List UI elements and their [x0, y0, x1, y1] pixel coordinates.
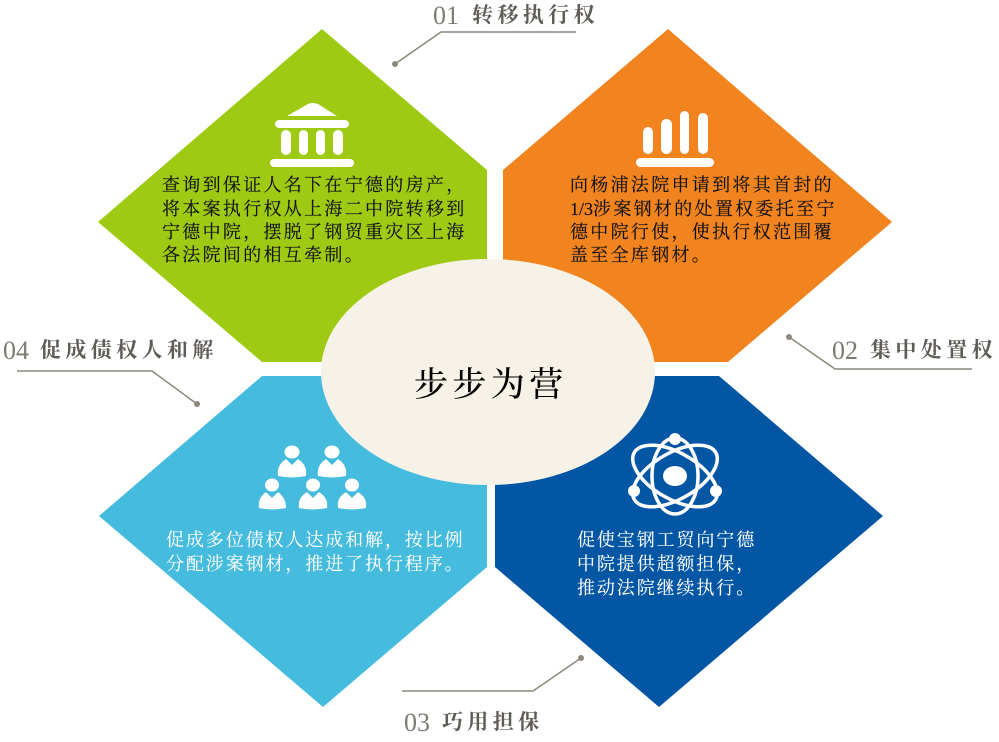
text block: green panel — [162, 175, 466, 265]
label 02 — [832, 336, 997, 365]
leader line 04 — [17, 371, 200, 407]
panel: orange diamond — [503, 29, 892, 362]
label 04: 促成债权人和解 — [40, 338, 218, 362]
text block: green panel: 宁德中院，摆脱了钢贸重灾区上海 — [162, 222, 466, 242]
text block: light blue panel: 分配涉案钢材，推进了执行程序。 — [166, 554, 464, 574]
label 04: 04 — [3, 336, 29, 365]
text block: green panel: 各法院间的相互牵制。 — [162, 245, 365, 265]
icon: atom — [623, 433, 727, 519]
icon: bank — [270, 103, 354, 167]
center ellipse — [321, 259, 655, 485]
text block: dark blue panel — [577, 530, 756, 598]
text block: orange panel: 德中院行使，使执行权范围覆 — [570, 222, 834, 242]
text block: orange panel: 1/3涉案钢材的处置权委托至宁 — [570, 199, 837, 219]
label 02: 02 — [832, 336, 858, 365]
text block: dark blue panel: 中院提供超额担保， — [577, 553, 756, 574]
text block: dark blue panel: 推动法院继续执行。 — [577, 578, 756, 598]
leader line 02 — [786, 334, 972, 369]
icon: bar chart — [636, 111, 714, 167]
text block: dark blue panel: 促使宝钢工贸向宁德 — [577, 530, 756, 550]
icon: people group — [259, 446, 366, 510]
panel: dark blue diamond — [495, 376, 883, 707]
text block: light blue panel: 促成多位债权人达成和解，按比例 — [166, 530, 464, 550]
text block: orange panel: 盖至全库钢材。 — [570, 245, 712, 265]
text block: orange panel — [570, 174, 837, 265]
text block: light blue panel — [166, 530, 464, 574]
label 04 — [3, 336, 218, 365]
title: 步步为营 — [414, 366, 568, 404]
text block: green panel: 查询到保证人名下在宁德的房产， — [162, 175, 466, 195]
label 03 — [404, 708, 544, 737]
text block: orange panel: 向杨浦法院申请到将其首封的 — [570, 174, 834, 195]
label 01: 转移执行权 — [472, 3, 599, 27]
label 03: 03 — [404, 708, 430, 737]
label 01 — [433, 1, 599, 30]
leader line 01 — [392, 32, 576, 67]
leader line 03 — [402, 655, 584, 691]
text block: green panel: 将本案执行权从上海二中院转移到 — [162, 199, 466, 219]
label 02: 集中处置权 — [870, 338, 997, 362]
panel: light blue diamond — [99, 376, 487, 707]
label 03: 巧用担保 — [442, 710, 544, 734]
panel: green diamond — [98, 29, 487, 362]
label 01: 01 — [433, 1, 459, 30]
